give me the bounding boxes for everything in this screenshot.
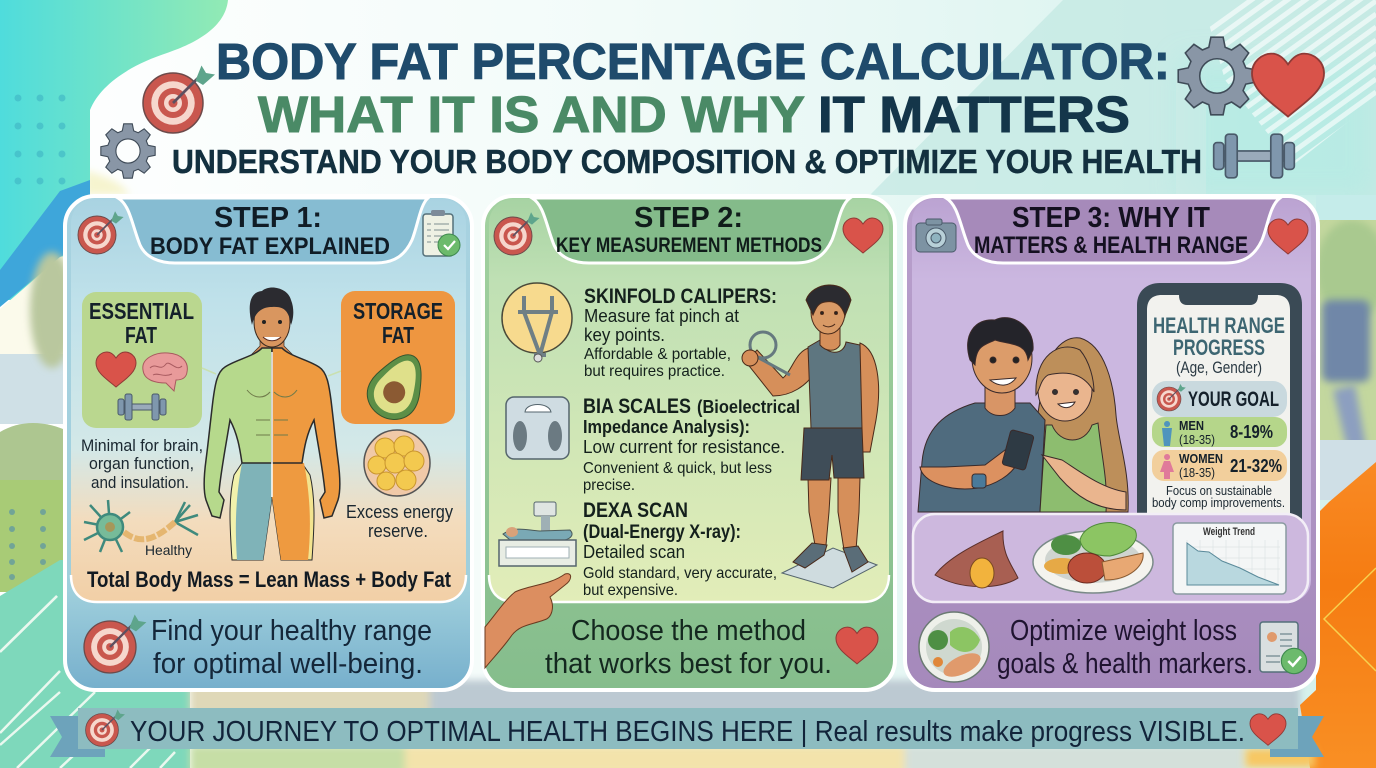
essential fat description: Minimal for brain, — [81, 436, 203, 455]
icon: dumbbell — [118, 394, 166, 420]
connector lines — [202, 368, 341, 376]
step 3 takeaway: goals & health markers. — [997, 648, 1253, 680]
icon: DEXA scanner — [499, 502, 576, 566]
icon: target header — [143, 66, 215, 133]
step 1 takeaway — [151, 615, 432, 680]
step 3 heading tab: MATTERS & HEALTH RANGE — [974, 232, 1248, 259]
food and chart panel — [913, 514, 1308, 602]
step 2 takeaway: that works best for you. — [545, 648, 832, 680]
icon: veggie plate — [919, 612, 989, 682]
storage fat box: STORAGE — [353, 298, 443, 324]
figure: man on scale — [742, 285, 879, 588]
icon: camera — [916, 219, 956, 252]
storage fat box: FAT — [382, 322, 414, 348]
title line 1: BODY FAT PERCENTAGE CALCULATOR: — [216, 33, 1170, 90]
essential fat box: FAT — [125, 322, 157, 348]
women row: WOMEN — [1179, 451, 1223, 466]
panel: step 2 — [483, 196, 895, 690]
storage fat box — [341, 291, 455, 428]
step 2 heading tab: KEY MEASUREMENT METHODS — [556, 234, 822, 257]
icon: target footer — [84, 614, 146, 673]
icon: heart step 2 — [843, 218, 883, 253]
text: BIA scales: precise. — [583, 477, 635, 494]
phone heading: (Age, Gender) — [1176, 358, 1262, 377]
text: BIA scales: Convenient & quick, but less — [583, 460, 772, 477]
step 3 takeaway: Optimize weight loss — [1010, 615, 1237, 647]
text: skinfold — [584, 285, 777, 380]
text: skinfold: Measure fat pinch at — [584, 306, 739, 326]
phone heading: HEALTH RANGE — [1153, 313, 1285, 338]
banner — [50, 708, 1324, 757]
icon: avocado — [359, 344, 436, 428]
icon: gear left — [101, 124, 155, 178]
text: skinfold: SKINFOLD CALIPERS: — [584, 285, 777, 308]
banner target — [86, 710, 125, 746]
subtitle: UNDERSTAND YOUR BODY COMPOSITION & OPTIMIZE YOUR HEALTH — [172, 143, 1202, 180]
healthy label: Healthy — [145, 542, 192, 558]
icon: target step 2 — [494, 212, 540, 255]
men row: (18-35) — [1179, 432, 1215, 447]
step 1 takeaway: for optimal well-being. — [153, 648, 423, 680]
text: DEXA: Gold standard, very accurate, — [583, 565, 777, 582]
icon: fat cells — [364, 430, 430, 496]
figure: couple — [918, 318, 1128, 512]
phone note: body comp improvements. — [1152, 495, 1285, 510]
title line 2 dark: IT MATTERS — [818, 86, 1130, 143]
phone note: Focus on sustainable — [1166, 483, 1272, 498]
phone note — [1152, 483, 1285, 510]
dot pattern: top left — [14, 94, 66, 184]
women row: (18-35) — [1179, 465, 1215, 480]
essential fat description: organ function, — [89, 454, 194, 473]
men row — [1152, 417, 1287, 447]
icon: heart header — [1252, 54, 1324, 117]
step 3 heading tab — [946, 198, 1280, 263]
banner heart — [1250, 714, 1286, 745]
your goal row: YOUR GOAL — [1188, 388, 1279, 411]
step 2 heading tab: STEP 2: — [634, 202, 743, 234]
icon: brain — [143, 353, 187, 391]
title line 2 green: WHAT IT IS AND WHY — [258, 86, 805, 143]
text: skinfold: Affordable & portable, — [584, 346, 731, 363]
text: skinfold: key points. — [584, 325, 665, 345]
chart: weight trend: Weight Trend — [1203, 526, 1255, 538]
text: BIA scales: BIA SCALES — [583, 395, 691, 418]
text: DEXA — [583, 499, 777, 599]
storage fat description — [346, 502, 453, 541]
text: skinfold: but requires practice. — [584, 363, 725, 380]
title — [172, 33, 1202, 180]
essential fat box — [82, 292, 202, 428]
formula: Total Body Mass = Lean Mass + Body Fat — [87, 567, 452, 592]
your goal row — [1152, 381, 1287, 417]
icon: BIA scale — [506, 397, 569, 459]
storage fat description: reserve. — [368, 521, 428, 541]
step 2 takeaway: Choose the method — [571, 615, 806, 647]
essential fat description — [81, 436, 203, 492]
text: BIA scales: Impedance Analysis): — [583, 417, 750, 437]
women row — [1152, 450, 1287, 481]
text: BIA scales: (Bioelectrical — [697, 397, 800, 417]
icon: heart — [96, 352, 136, 387]
icon: calipers — [502, 283, 572, 362]
text: DEXA: Detailed scan — [583, 542, 685, 562]
icon: target step 1 — [78, 211, 124, 254]
essential fat description: and insulation. — [91, 473, 189, 492]
phone heading: PROGRESS — [1173, 335, 1265, 360]
step 3 heading tab: STEP 3: WHY IT — [1012, 202, 1210, 234]
icon: neuron — [84, 500, 198, 552]
text: BIA scales: Low current for resistance. — [583, 437, 785, 457]
banner text: YOUR JOURNEY TO OPTIMAL HEALTH BEGINS HERE | Real results make progress VISIBLE. — [130, 716, 1245, 748]
women row: 21-32% — [1230, 456, 1282, 476]
icon: clipboard step 1 — [423, 210, 460, 256]
icon: dumbbell header — [1214, 134, 1294, 178]
panel: step 1 — [65, 196, 472, 690]
step 1 takeaway: Find your healthy range — [151, 615, 432, 647]
chart: weight trend — [1173, 523, 1286, 594]
icon: pointing hand — [485, 574, 571, 668]
text: BIA scales — [583, 395, 800, 494]
storage fat description: Excess energy — [346, 502, 453, 522]
phone — [1137, 283, 1302, 520]
panel: step 3 — [905, 196, 1318, 690]
essential fat box: ESSENTIAL — [89, 298, 194, 324]
dot pattern: lower left — [9, 509, 46, 580]
figure: body split — [204, 288, 340, 560]
men row: 8-19% — [1230, 422, 1273, 442]
icon: gear right — [1178, 37, 1256, 115]
icon: heart footer — [836, 627, 878, 664]
icon: heart step 3 — [1268, 219, 1308, 254]
step 2 heading tab — [532, 198, 850, 263]
icon: clipboard step 3 — [1260, 622, 1307, 674]
text: DEXA: DEXA SCAN — [583, 499, 688, 522]
icon: salad plate — [1033, 523, 1153, 593]
phone heading — [1153, 313, 1285, 377]
step 1 heading tab — [118, 198, 428, 263]
step 3 takeaway — [997, 615, 1253, 680]
step 2 takeaway — [545, 615, 832, 680]
text: DEXA: but expensive. — [583, 582, 678, 599]
text: DEXA: (Dual-Energy X-ray): — [583, 522, 741, 543]
men row: MEN — [1179, 418, 1204, 433]
step 1 heading tab: BODY FAT EXPLAINED — [150, 233, 390, 260]
icon: sweet potato — [935, 531, 1018, 588]
step 1 heading tab: STEP 1: — [214, 202, 322, 234]
